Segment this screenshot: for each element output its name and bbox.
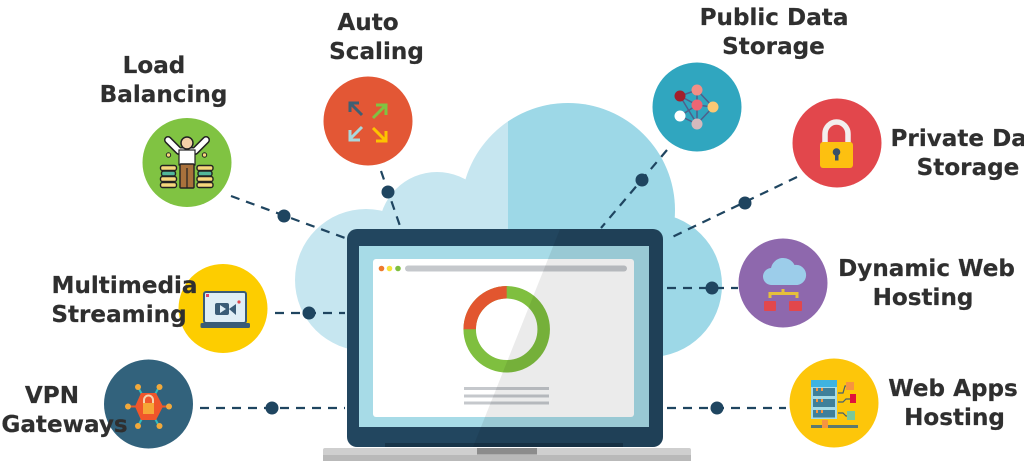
label: dynamic web hosting: Dynamic Web bbox=[838, 256, 1015, 282]
label: web apps hosting: Web Apps bbox=[888, 376, 1018, 402]
laptop base bbox=[323, 448, 691, 461]
label: public data storage: Public Data bbox=[700, 5, 848, 31]
label: vpn gateways: Gateways bbox=[1, 412, 128, 438]
icon: multimedia streaming bbox=[178, 264, 268, 353]
label: vpn gateways: VPN bbox=[25, 383, 79, 409]
screen shine bbox=[481, 246, 649, 427]
icon: auto scaling bbox=[324, 76, 412, 166]
label: load balancing: Load bbox=[123, 53, 185, 79]
browser window bbox=[373, 259, 634, 417]
icon: load balancing bbox=[142, 118, 232, 207]
label: private data storage: Storage bbox=[917, 155, 1019, 181]
label: auto scaling: Scaling bbox=[329, 39, 424, 65]
icon: web apps hosting bbox=[790, 358, 878, 448]
label: public data storage: Storage bbox=[722, 34, 825, 60]
label: multimedia streaming: Streaming bbox=[51, 302, 187, 328]
laptop lid bbox=[347, 229, 663, 447]
cloud background bbox=[295, 103, 722, 357]
laptop bbox=[323, 229, 691, 461]
text lines bbox=[464, 387, 549, 404]
icon: public data storage bbox=[652, 62, 742, 152]
dashed connectors bbox=[200, 150, 797, 408]
laptop screen bbox=[359, 246, 649, 427]
label: web apps hosting: Hosting bbox=[904, 405, 1005, 431]
browser dots bbox=[379, 266, 401, 271]
address bar bbox=[405, 266, 627, 272]
icon: private data storage bbox=[792, 98, 882, 188]
label: multimedia streaming: Multimedia bbox=[51, 273, 198, 299]
donut chart bbox=[470, 292, 544, 366]
icon: dynamic web hosting bbox=[738, 238, 828, 328]
icon: vpn gateways bbox=[104, 360, 193, 448]
label: auto scaling: Auto bbox=[337, 10, 399, 36]
label: load balancing: Balancing bbox=[100, 82, 227, 108]
connector nodes bbox=[266, 174, 752, 414]
label: dynamic web hosting: Hosting bbox=[873, 285, 973, 311]
